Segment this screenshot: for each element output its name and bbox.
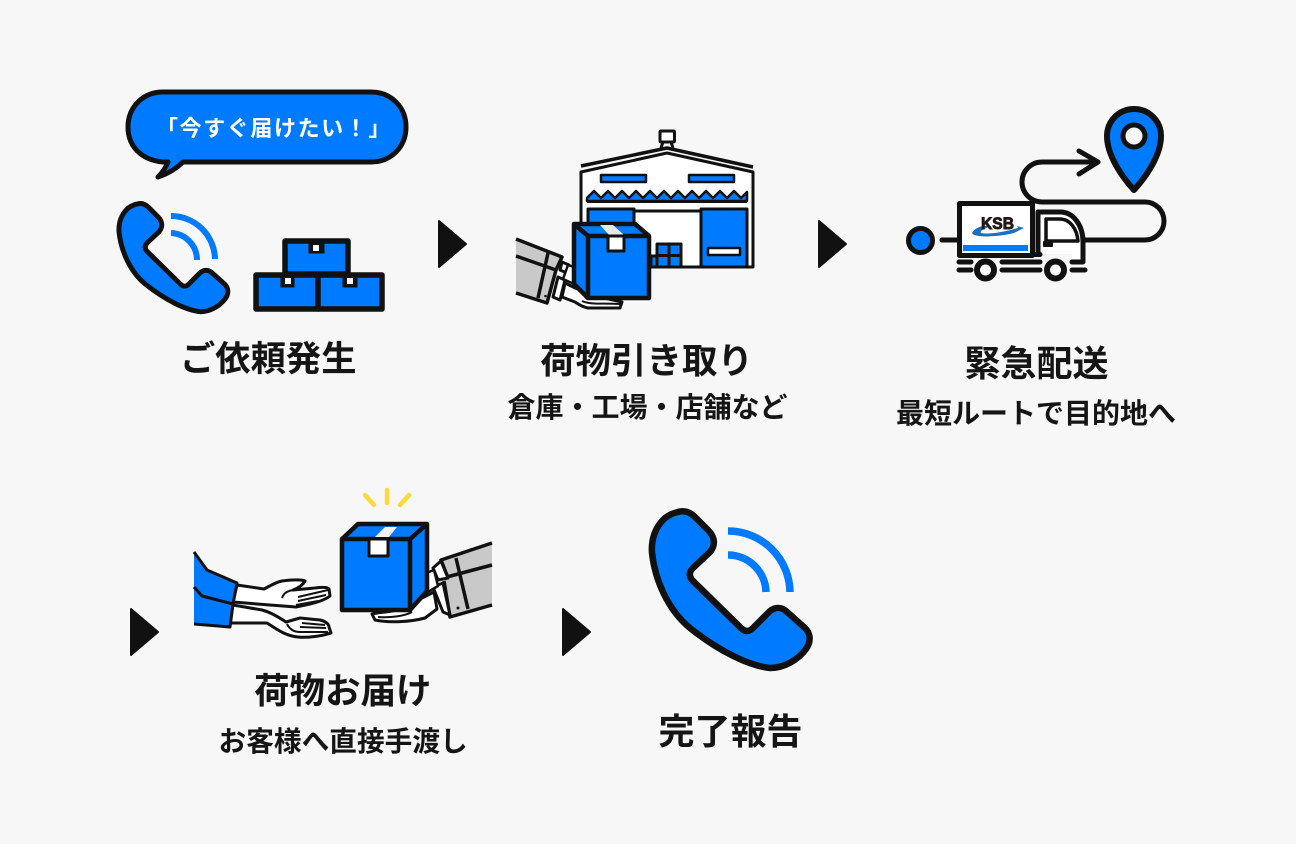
icon: arm holding box [516, 224, 649, 308]
icon: telephone [119, 204, 228, 312]
icon: map pin [1107, 109, 1161, 190]
heading: step 4: 荷物お届け [254, 671, 432, 711]
icon: stacked boxes [256, 241, 382, 309]
heading: step 2: 荷物引き取り [540, 341, 753, 381]
logo: KSB [972, 214, 1024, 236]
arrow 1 [439, 221, 466, 267]
panel: step 3 delivery [896, 109, 1176, 429]
speech bubble [128, 92, 406, 177]
icon: parcel [342, 524, 427, 610]
panel: step 1 request [119, 92, 406, 379]
subtext: step 4: お客様へ直接手渡し [218, 726, 468, 757]
arrow 2 [819, 221, 846, 267]
arrow 3 [131, 609, 158, 655]
panel: step 4 handover [194, 490, 492, 757]
icon: large telephone [652, 511, 810, 668]
logo: KSB: KSB [981, 214, 1014, 233]
icon: warehouse [581, 131, 753, 267]
icon: start point [908, 228, 932, 252]
panel: step 5 report [652, 511, 810, 752]
icon: receiving hands [194, 552, 331, 637]
arrow 4 [563, 609, 590, 655]
subtext: step 3: 最短ルートで目的地へ [896, 398, 1176, 429]
icon: sparkle rays [365, 490, 409, 505]
speech bubble: 「今すぐ届けたい！」 [156, 116, 392, 141]
icon: arm with hand [372, 543, 492, 622]
heading: step 1: ご依頼発生 [180, 340, 356, 379]
icon: route with arrow [942, 151, 1164, 240]
icon: truck [959, 203, 1085, 278]
subtext: step 2: 倉庫・工場・店舗など [508, 392, 788, 423]
heading: step 3: 緊急配送 [964, 343, 1109, 384]
panel: step 2 pickup [508, 131, 788, 423]
heading: step 5: 完了報告 [658, 711, 803, 752]
